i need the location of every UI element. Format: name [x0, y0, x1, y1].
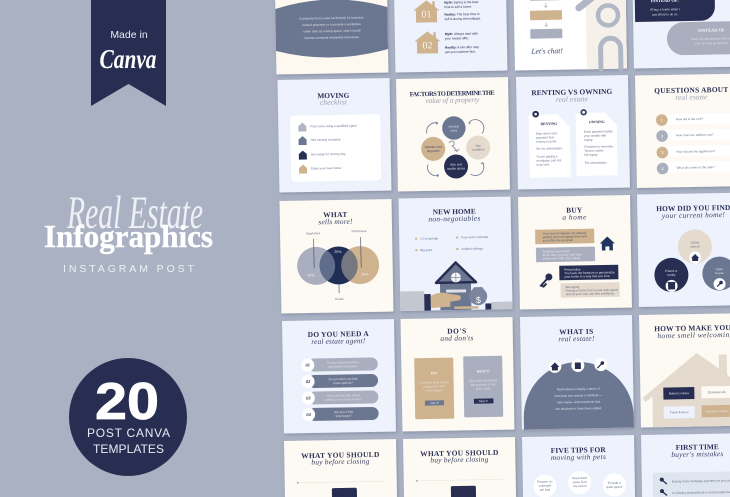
info box 2: Each time you pay your loan	[543, 252, 582, 257]
subheading: value of a property	[425, 95, 480, 105]
factor circle: interest rates: rates	[450, 128, 458, 133]
navy box	[332, 488, 357, 497]
pill 04: time buyer?	[336, 414, 352, 418]
card: renting vs owning	[516, 75, 630, 189]
ribbon text: Made in: Made in	[110, 29, 148, 41]
white list panel	[290, 114, 381, 182]
tag: renting: RENTING	[540, 122, 557, 126]
pill 02	[301, 374, 378, 388]
subheading: real estate!	[558, 334, 595, 343]
label apartment: Apartment	[306, 231, 320, 236]
navy box	[451, 486, 476, 497]
subheading: buyer's mistakes	[671, 449, 724, 459]
card: myth and reality	[394, 0, 507, 72]
question row 4: What all comes in the sale?	[677, 165, 715, 170]
factor circle: interest rates	[442, 116, 466, 140]
card: how to make your home smell welcoming	[639, 313, 730, 427]
tag: owning: your wealth with	[584, 133, 607, 138]
arch text: land plus any natural or artificial —	[555, 393, 603, 398]
tip circle 2	[568, 471, 592, 494]
info box 3: Personalize	[564, 267, 581, 272]
wave text	[299, 15, 364, 40]
factor circle: age condition	[466, 135, 490, 160]
info box 1: Your next mortgage can already	[543, 231, 587, 236]
bullet list: Vaulted ceilings	[461, 247, 483, 251]
myth text: get you nowhere fast.	[445, 50, 476, 54]
flow box 2	[530, 10, 562, 20]
flow arrows	[544, 3, 548, 26]
flow box 3	[530, 29, 562, 39]
card: buy a home	[518, 195, 632, 309]
arch text: are attached or have been added.	[555, 406, 602, 411]
pill 01: 01	[305, 363, 310, 368]
tag: owning: Each payment builds	[584, 129, 613, 134]
scent box: baked cookies: Baked cookies	[669, 391, 689, 395]
tag: owning: full equity.	[584, 153, 598, 157]
heading: DO YOU NEED A	[308, 329, 369, 339]
gray panel text	[691, 27, 730, 45]
heading: NEW HOME	[433, 207, 476, 216]
let's chat: Let's chat!	[530, 46, 563, 56]
house background shape	[586, 0, 627, 69]
pill 02: 02	[306, 379, 311, 384]
source circle: friend or family: family	[667, 273, 676, 277]
tip circle 2: away from	[573, 480, 587, 484]
factor circle: upgrades: upgrades	[427, 149, 440, 153]
heading: RENTING VS OWNING	[531, 87, 613, 97]
heading: QUESTIONS ABOUT	[654, 85, 728, 95]
card: do's and don'ts	[400, 317, 514, 431]
gray panel	[667, 21, 730, 55]
gray panel text: INSTEAD OF	[698, 27, 725, 33]
myth text: time to sell a home.	[444, 5, 472, 9]
tag: renting: You're paying a	[536, 154, 558, 159]
heading: HOW DID YOU FIND	[656, 203, 730, 213]
card: moving checklist	[278, 78, 391, 192]
subheading: non-negotiables	[428, 214, 481, 223]
panel: don't: the process, it hits	[471, 382, 496, 387]
info box 1	[535, 229, 594, 244]
question row 2: How much do utilities cost?	[676, 133, 714, 137]
heading: FIVE TIPS FOR	[551, 445, 606, 455]
pill 02: Do you wish you had	[329, 377, 358, 381]
card: new home non-negotiables	[398, 197, 512, 311]
source circle: online search: search	[690, 244, 700, 249]
info box 4: Having a home that is your safe space	[566, 288, 619, 293]
navy panel text	[650, 0, 680, 17]
panel: don't	[463, 356, 503, 417]
tip circle 3	[603, 473, 626, 497]
question row 4: 4	[661, 166, 665, 171]
checklist icon 3	[299, 151, 307, 160]
tip circle 1: pet bag	[540, 488, 550, 492]
subheading: buy before closing	[430, 455, 489, 465]
serif title: Infographics: Infographics	[44, 218, 213, 254]
pointer lines	[314, 237, 362, 293]
checklist icon 2	[298, 136, 307, 145]
card: first time buyer's mistakes	[641, 433, 730, 497]
card: how did you find your home	[637, 193, 730, 307]
tag: owning: Freedom to renovate,	[584, 144, 614, 149]
info box 1: you'd like the program.	[543, 238, 574, 243]
question row 4	[657, 161, 730, 174]
subheading: a home	[562, 212, 587, 222]
question row 3: How old are the appliances?	[676, 149, 716, 154]
card: what sells more venn	[280, 199, 393, 313]
venn diagram: 25%	[334, 250, 342, 254]
panel: do: program for first	[423, 384, 445, 389]
tag: renting: money is gone.	[536, 139, 557, 144]
info box 2: build value with your equity	[543, 256, 581, 261]
pill 01	[301, 357, 378, 372]
tip circle 2: Keep them	[572, 476, 588, 480]
checklist item 3: Get ready for moving day	[311, 152, 346, 156]
tag: owning: OWNING	[589, 120, 605, 124]
checklist item 2: Hire moving company	[311, 137, 341, 142]
question row 1: How old is the roof?	[676, 117, 703, 121]
info box 4	[561, 282, 620, 298]
pill 03: 03	[306, 395, 311, 401]
heading: WHAT IS	[559, 327, 593, 336]
source circle: friend or family	[654, 258, 689, 292]
venn diagram: 35%	[361, 272, 369, 277]
subheading: and don'ts	[440, 333, 474, 343]
heading: WHAT YOU SHOULD	[301, 450, 379, 460]
navy panel	[635, 0, 715, 22]
myth text: Myth: Always start with	[445, 32, 478, 36]
subheading: real estate agent!	[311, 336, 366, 346]
house icon	[600, 236, 615, 251]
timeline	[298, 481, 384, 483]
house icon 02: 02	[422, 40, 433, 52]
navy panel text: can afford to do so.	[652, 12, 678, 17]
bullet list	[415, 235, 489, 252]
card: factors value of a property	[396, 77, 510, 191]
navy panel text: I'll buy a home when I	[650, 7, 680, 12]
gray panel text: you can buy as early as	[695, 41, 728, 45]
badge label line 1: POST CANVA	[87, 426, 170, 440]
wave band	[275, 0, 388, 58]
label house: House	[335, 297, 344, 301]
info box 3	[559, 265, 618, 280]
question row 1	[656, 113, 730, 126]
timeline marker	[297, 482, 299, 484]
timeline marker	[416, 480, 418, 482]
panel: do	[414, 358, 454, 419]
house line art	[579, 0, 621, 69]
ribbon badge: Made in Canva	[91, 0, 166, 106]
left sleeve strip	[400, 291, 424, 311]
subheading: buy before closing	[311, 457, 370, 467]
beige tray	[454, 306, 478, 309]
pill 03	[302, 390, 378, 405]
house illustration	[436, 262, 476, 310]
factor circle: age condition: Age	[475, 144, 481, 148]
heading: WHAT	[323, 210, 347, 219]
tip circle 1	[533, 474, 557, 497]
checklist icon 1	[298, 123, 306, 132]
checklist icon 4	[299, 164, 307, 174]
wave text: related purposes or to provide a workplace	[302, 22, 361, 27]
panel: don't: Buy more car during	[469, 378, 497, 383]
info box 4: Belonging	[566, 285, 580, 289]
label penthouse: Penthouse	[352, 229, 367, 233]
mistakes panel	[653, 471, 730, 497]
icon: building	[571, 359, 584, 372]
tip circle 3: Provide a	[608, 481, 621, 485]
scent box: scented candles: Scented candles	[706, 409, 729, 413]
cycle arrows	[427, 119, 485, 177]
question row 2: 2	[661, 134, 664, 139]
info box 2: Building Investment	[543, 249, 570, 254]
bullet list: Big yard	[420, 248, 432, 252]
card: questions about real estate	[635, 74, 730, 188]
mistake text 2: Confusing prequalification and preapproval	[672, 490, 730, 495]
factor circle: upgrades: Updates and	[424, 145, 442, 149]
wave text: A property that is used exclusively for business	[299, 15, 364, 21]
question row 3	[656, 145, 730, 158]
pill 03: selling your current home?	[325, 397, 362, 402]
bullet list: Fast work commute	[461, 235, 488, 239]
badge label line 2: TEMPLATES	[93, 442, 164, 456]
icon: house	[548, 360, 561, 373]
arch text: man-made—improvements that	[557, 400, 600, 404]
tag: renting	[529, 111, 571, 178]
info box 2	[536, 247, 595, 262]
myth text: sell is during the holidays.	[445, 16, 481, 21]
venn diagram: 40%	[307, 273, 315, 278]
icon: key	[594, 358, 607, 371]
scent box: essential oils: Essential oils	[708, 390, 726, 394]
subheading: real estate	[675, 92, 708, 102]
tag: owning: equity.	[584, 138, 593, 142]
tag: owning: Tax advantages.	[584, 160, 607, 165]
arch text	[554, 387, 603, 411]
subheading: checklist	[320, 97, 348, 107]
panel: don't: DON'T	[477, 368, 490, 374]
myth text: Reality: The best time to	[444, 12, 480, 17]
myth text: your lowest offer.	[445, 36, 469, 41]
tag: renting: May return rent	[536, 131, 557, 136]
hand holding house keys	[424, 292, 461, 311]
factor circle: size and usable space: Size and	[450, 162, 462, 167]
heading: FIRST TIME	[676, 442, 719, 452]
factor circle: size and usable space	[444, 154, 468, 179]
pill 02: more options?	[333, 381, 353, 385]
info box 4: and all your own can feel satisfying	[566, 291, 614, 296]
question row 3: 3	[661, 150, 664, 155]
card: what you should buy before closing 1	[284, 439, 397, 497]
heading: DO'S	[447, 326, 466, 336]
factor circle: age condition: condition	[472, 147, 485, 152]
center key icon	[449, 141, 459, 152]
heading: WHAT YOU SHOULD	[420, 448, 498, 458]
main title block	[44, 187, 213, 275]
scent box: fresh flowers: Fresh flowers	[670, 410, 689, 414]
source circle: open house: Open	[715, 267, 723, 271]
pill 01: Do you need extensive	[327, 360, 359, 365]
factor circle: size and usable space: usable space	[447, 166, 465, 171]
card: what you should buy before closing 2	[403, 437, 516, 497]
factor circle: upgrades	[421, 137, 445, 161]
card: five tips for moving with pets	[522, 435, 635, 497]
pill 04	[302, 407, 379, 421]
panel: do: Look into your state's	[420, 380, 449, 385]
tag: renting: your own.	[536, 162, 550, 167]
question row 2	[656, 129, 730, 142]
arch text: Real estate is simply a piece of	[557, 387, 600, 391]
badge number: 20	[95, 373, 159, 431]
heading: MOVING	[317, 91, 350, 100]
panel: do: DO	[431, 370, 437, 375]
card: flow with let's chat	[513, 0, 627, 70]
card: property definition with wave band	[274, 0, 388, 74]
key icon 1	[660, 478, 667, 484]
ribbon logo: Canva: Canva	[100, 44, 156, 74]
factor circle: interest rates: Interest	[449, 124, 459, 129]
panel: do: Get it!	[430, 401, 439, 405]
tip circle 2: the action	[573, 484, 587, 488]
house silhouette	[642, 352, 730, 427]
house icon 01: 01	[421, 9, 432, 21]
bullet list: 2 Car garage	[420, 236, 439, 241]
subheading: your current home!	[661, 210, 725, 220]
info box 1: paying more mortgage than rent	[543, 234, 587, 239]
card: instead of	[632, 0, 730, 68]
checklist item 4: Enjoy your new home!	[311, 166, 342, 170]
source circle: online search	[678, 229, 712, 264]
key icon 2	[660, 489, 667, 496]
tip circle 1: overnight	[538, 483, 551, 488]
timeline	[417, 479, 503, 481]
source circle: online search: Online	[690, 240, 700, 245]
myth text: Myth: Spring is the best	[444, 0, 478, 5]
subheading: sells more!	[318, 217, 353, 226]
myth text	[444, 0, 482, 54]
checklist item 1: Find home using a qualified agent	[310, 124, 357, 128]
flow box 1	[530, 0, 562, 1]
script title: Real Estate: Real Estate	[66, 187, 203, 239]
source circle: friend or family: Friend or	[665, 269, 678, 273]
tag: renting: payment that	[536, 135, 554, 140]
tag: renting: mortgage, just not	[536, 158, 561, 163]
subtitle: Instagram post: INSTAGRAM POST	[63, 263, 195, 275]
tag: owning	[576, 109, 618, 176]
question row 1: 1	[661, 118, 664, 123]
key icon	[541, 273, 553, 287]
venn diagram	[297, 246, 379, 285]
source circle: open house	[702, 256, 730, 291]
tip circle 1: Prepare an	[537, 479, 553, 484]
pill 04: Are you a first	[334, 410, 353, 414]
navy cuff right	[485, 303, 491, 309]
heading: BUY	[566, 205, 583, 215]
subheading: real estate	[556, 94, 589, 104]
tag: renting: No tax advantages.	[536, 146, 563, 151]
badge: 20 post canva templates	[69, 358, 187, 476]
pill 01: real estate expertise?	[328, 364, 358, 369]
wave text: instead constitute residential real estate.	[304, 35, 360, 40]
pill 04: 04	[306, 412, 312, 417]
subheading: moving with pets	[551, 452, 606, 462]
card: do you need a real estate agent	[282, 319, 396, 433]
tag: owning: Tenant, obtain	[584, 148, 604, 153]
right sleeve strip	[491, 302, 512, 309]
info box 3: your home in a way that you love	[564, 274, 610, 279]
slate arch	[523, 361, 634, 429]
money bag icon: $	[476, 295, 481, 305]
card: what is real estate	[520, 315, 634, 429]
myth text: Reality: A low offer may	[445, 45, 479, 50]
info box 3: You have the freedom to personalize	[564, 270, 615, 275]
panel: don't: your credit	[476, 386, 491, 391]
tip circle 3: quiet space	[606, 485, 623, 489]
panel: do: home buyers	[425, 388, 444, 393]
pill 03: Have you thought about	[327, 393, 360, 398]
wave text: rather than as a living space, which would	[303, 29, 361, 34]
panel: don't: Skip it!	[479, 399, 488, 403]
heading: FACTORS TO DETERMINE THE	[410, 90, 495, 98]
source circle: open house: house	[715, 271, 724, 275]
